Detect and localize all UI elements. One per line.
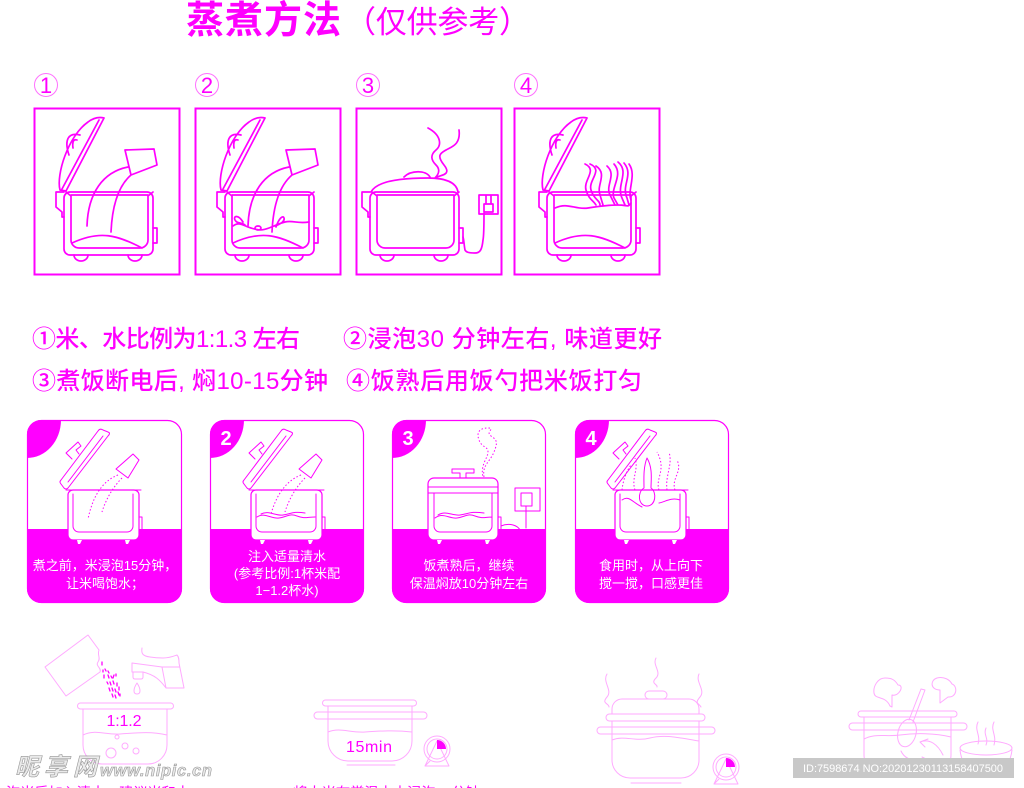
step number 4 [514,73,538,98]
card 2 [210,420,364,603]
step number 3: 3 [362,73,374,98]
card 2: 2 [220,428,232,450]
step number 1: 1 [40,73,52,98]
instruction text: ①米、水比例为1:1.3 左右 [32,326,300,353]
step number 1 [34,73,58,98]
card 4: 4 [585,428,597,450]
card 3 [392,420,546,603]
watermark logo: 昵享网 [15,754,100,781]
card 4: 食用时，从上向下 [599,558,703,573]
card 3: 饭煮熟后，继续 [423,558,515,573]
watermark logo [15,754,212,781]
card 1 [27,420,182,603]
step number 2 [196,73,218,98]
instruction text [32,326,662,395]
instruction text: ③煮饭断电后, 焖10-15分钟 [32,368,328,395]
title: 蒸煮方法 [186,0,341,42]
panel: step 3 cook [356,108,502,274]
illustration: soak 15min [293,700,480,788]
panel: step 4 stir [514,108,660,274]
illustration: stir and serve [849,677,1012,777]
card 3: 保温焖放10分钟左右 [410,576,528,591]
title [186,0,530,42]
illustration: rice and water pot [6,635,190,788]
watermark logo: www.nipic.cn [100,762,212,780]
illustration: soak 15min: 15min [346,739,392,756]
image id bar [793,758,1014,778]
card 2: (参考比例:1杯米配 [234,566,340,581]
card 1: 煮之前，米浸泡15分钟， [33,558,177,573]
card 3: 3 [402,428,414,450]
card 4 [575,420,729,603]
card 1: 让米喝饱水； [66,576,144,592]
step number 2: 2 [201,73,213,98]
illustration: covered pot [597,658,739,784]
step number 3 [356,73,380,98]
card 2: 注入适量清水 [248,549,326,564]
card 4: 搅一搅，口感更佳 [599,576,703,591]
illustration: rice and water pot: 1:1.2 [106,713,142,730]
instruction text: ④饭熟后用饭勺把米饭打匀 [346,368,642,395]
step number 4: 4 [520,73,532,98]
panel: step 1 add rice [34,108,180,274]
title: （仅供参考） [345,5,530,40]
card 2: 1−1.2杯水) [255,583,319,598]
panel: step 2 add water [196,108,340,274]
instruction text: ②浸泡30 分钟左右, 味道更好 [343,326,662,353]
image id bar: ID:7598674 NO:20201230113158407500 [803,763,1003,775]
